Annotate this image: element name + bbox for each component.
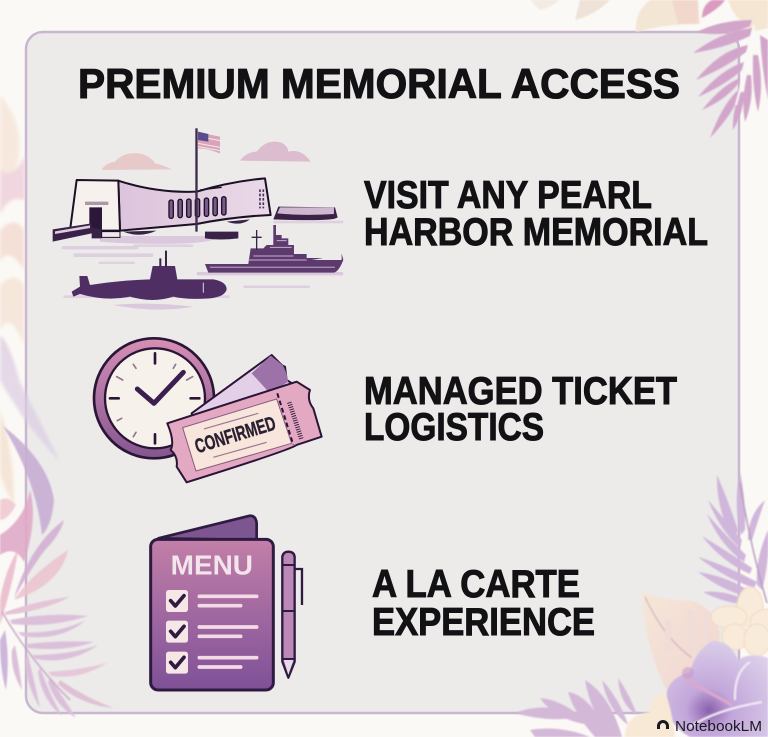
decoration: top flowers and leaves bbox=[530, 0, 768, 32]
heading: ticket logistics bbox=[364, 370, 677, 449]
decoration: peach monstera leaf bbox=[642, 592, 720, 692]
title: PREMIUM MEMORIAL ACCESS bbox=[78, 60, 680, 107]
heading: ticket logistics: LOGISTICS bbox=[364, 406, 544, 449]
menu label: MENU bbox=[171, 549, 253, 580]
heading: visit memorial bbox=[364, 174, 708, 254]
decoration: top right palm frond bbox=[693, 20, 768, 138]
front ticket bbox=[167, 382, 322, 482]
memorial building bbox=[70, 178, 271, 231]
clouds bbox=[102, 142, 311, 170]
gangway bbox=[53, 223, 102, 242]
decoration: left lower leaves bbox=[0, 426, 68, 625]
illustration: clock and tickets bbox=[94, 338, 322, 482]
heading: visit memorial: HARBOR MEMORIAL bbox=[364, 211, 708, 254]
clock bbox=[94, 338, 214, 458]
back cover bbox=[158, 516, 257, 540]
menu card bbox=[151, 539, 273, 690]
ferry bbox=[273, 207, 338, 220]
heading: a la carte bbox=[372, 563, 595, 644]
decoration: bottom cream flower bbox=[625, 692, 675, 737]
decoration: lower right palm frond bbox=[698, 472, 768, 604]
ticket label: CONFIRMED bbox=[192, 413, 278, 458]
pen bbox=[282, 552, 302, 678]
back ticket bbox=[192, 355, 300, 435]
decoration: left lower palm frond bbox=[0, 597, 114, 718]
illustration: menu and pen bbox=[151, 516, 302, 690]
heading: a la carte: EXPERIENCE bbox=[372, 601, 595, 644]
submarine bbox=[72, 266, 227, 300]
flag and pole bbox=[195, 128, 220, 232]
water reflections bbox=[62, 221, 343, 310]
small boat bbox=[205, 232, 238, 239]
heading: ticket logistics: MANAGED TICKET bbox=[364, 370, 677, 413]
decoration: left upper foliage bbox=[0, 95, 60, 505]
heading: a la carte: A LA CARTE bbox=[372, 563, 580, 606]
decoration: bottom palm frond bbox=[515, 678, 637, 737]
decoration: plumeria flower bbox=[711, 587, 768, 656]
illustration: Pearl Harbor memorial and ships bbox=[53, 128, 343, 310]
logo: NotebookLM: NotebookLM bbox=[675, 718, 762, 735]
heading: visit memorial: VISIT ANY PEARL bbox=[364, 174, 652, 217]
decoration: hibiscus flower bbox=[666, 641, 768, 737]
checklist bbox=[166, 590, 257, 674]
windows bbox=[169, 197, 226, 218]
battleship bbox=[205, 225, 343, 273]
